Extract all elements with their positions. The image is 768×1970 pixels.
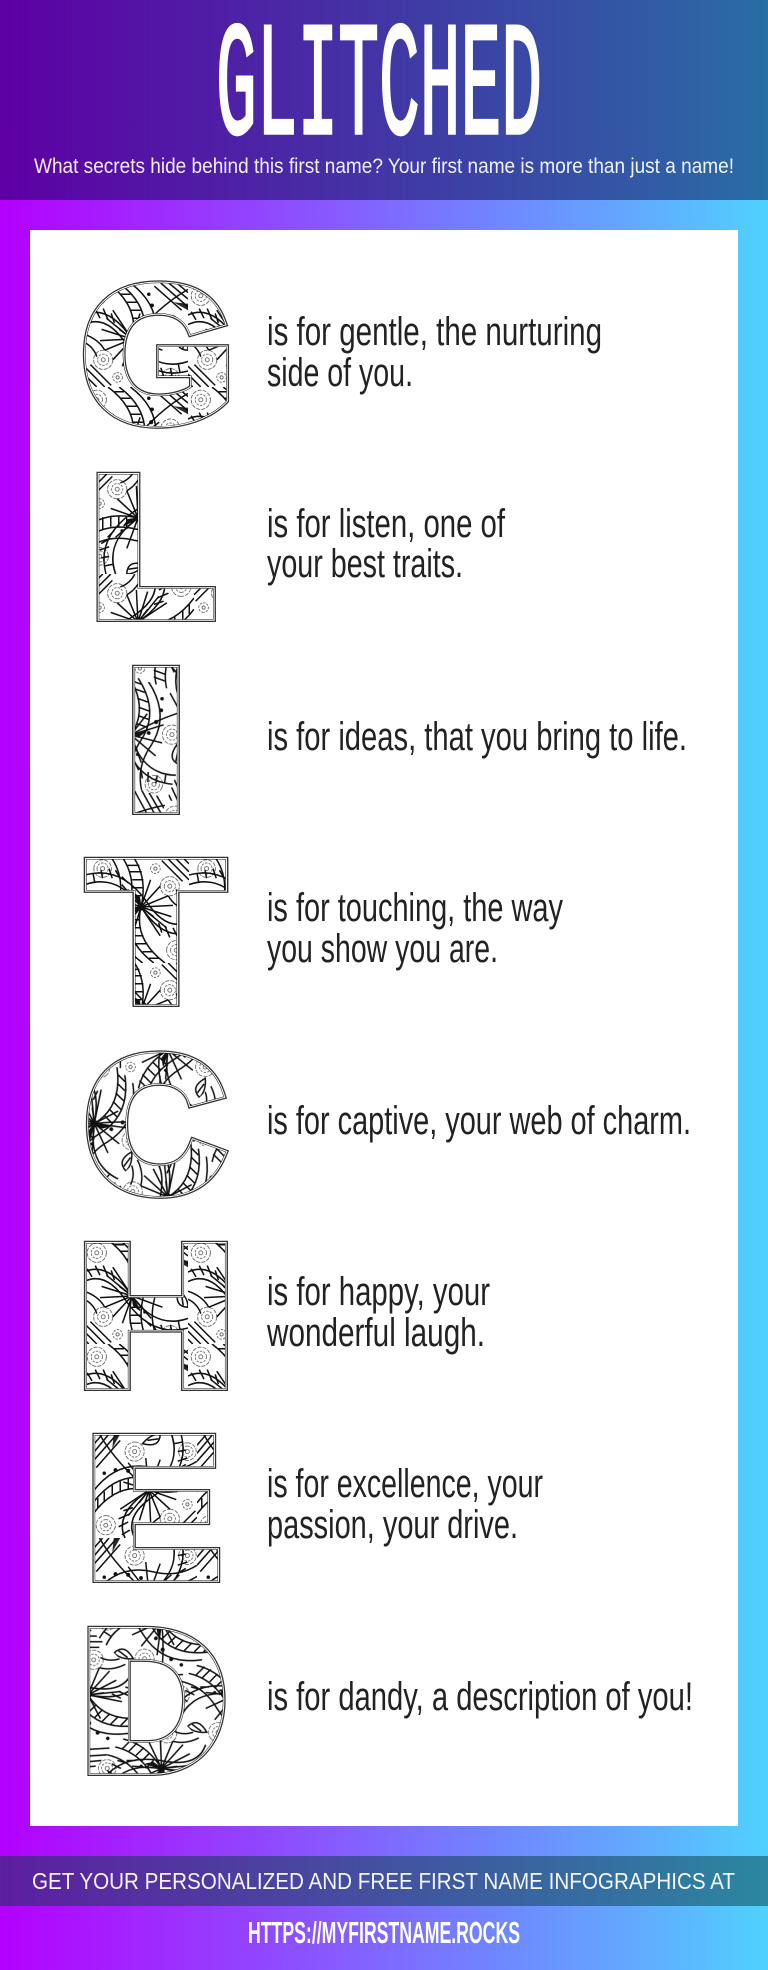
icon: patterned letter G: G [82,249,234,461]
row: G [82,249,602,461]
icon: patterned letter L: L [90,436,215,657]
row: D [81,1590,693,1811]
icon: patterned letter H: H [77,1205,235,1426]
text: H description: is for happy, your [267,1270,490,1314]
white content panel [30,230,738,1826]
footer band [0,1856,768,1906]
icon: patterned letter T: T [89,821,223,1042]
row: C [85,1019,691,1231]
icon: patterned letter D: D [81,1590,227,1811]
text: G description: is for gentle, the nurturing [267,310,602,354]
icon: patterned letter I: I [125,629,187,850]
icon: patterned letter E: E [86,1397,221,1618]
row: E [86,1397,543,1618]
icon: patterned letter C: C [85,1019,225,1231]
text: E description: is for excellence, your [267,1462,543,1506]
icon: patterned letter I: I [125,629,187,850]
icon: patterned letter G: G [82,249,234,461]
text: G description: side of you. [267,351,413,395]
text: T description [267,886,563,971]
icon: patterned letter T: T [89,821,223,1042]
icon: patterned letter H: H [77,1205,235,1426]
text: L description: your best traits. [267,542,463,586]
icon: patterned letter I: I [125,629,187,850]
header banner [0,0,768,200]
text: G description [267,310,602,395]
icon: patterned letter D: D [81,1590,227,1811]
icon: patterned letter H: H [77,1205,235,1426]
icon: patterned letter L: L [90,436,215,657]
row: T [89,821,563,1042]
icon: patterned letter E: E [86,1397,221,1618]
text: E description: passion, your drive. [267,1503,518,1547]
text: T description: is for touching, the way [267,886,563,930]
icon: patterned letter T: T [89,821,223,1042]
icon: patterned letter D: D [81,1590,227,1811]
row: I [125,629,687,850]
footer url: HTTPS://MYFIRSTNAME.ROCKS [248,1916,520,1950]
text: L description: is for listen, one of [267,502,506,546]
row: H [77,1205,490,1426]
icon: patterned letter C: C [85,1019,225,1231]
icon: patterned letter D: D [81,1590,227,1811]
text: T description: you show you are. [267,927,498,971]
icon: patterned letter I: I [125,629,187,850]
icon: patterned letter L: L [90,436,215,657]
icon: patterned letter C: C [85,1019,225,1231]
icon: patterned letter C: C [85,1019,225,1231]
text: L description [267,502,506,586]
row: L [90,436,506,657]
icon: patterned letter G: G [82,249,234,461]
icon: patterned letter E: E [86,1397,221,1618]
icon: patterned letter E: E [86,1397,221,1618]
text: H description: wonderful laugh. [266,1311,485,1355]
icon: patterned letter T: T [89,821,223,1042]
icon: patterned letter H: H [77,1205,235,1426]
text: H description [266,1270,490,1355]
icon: patterned letter L: L [90,436,215,657]
text: E description [267,1462,543,1547]
icon: patterned letter G: G [82,249,234,461]
